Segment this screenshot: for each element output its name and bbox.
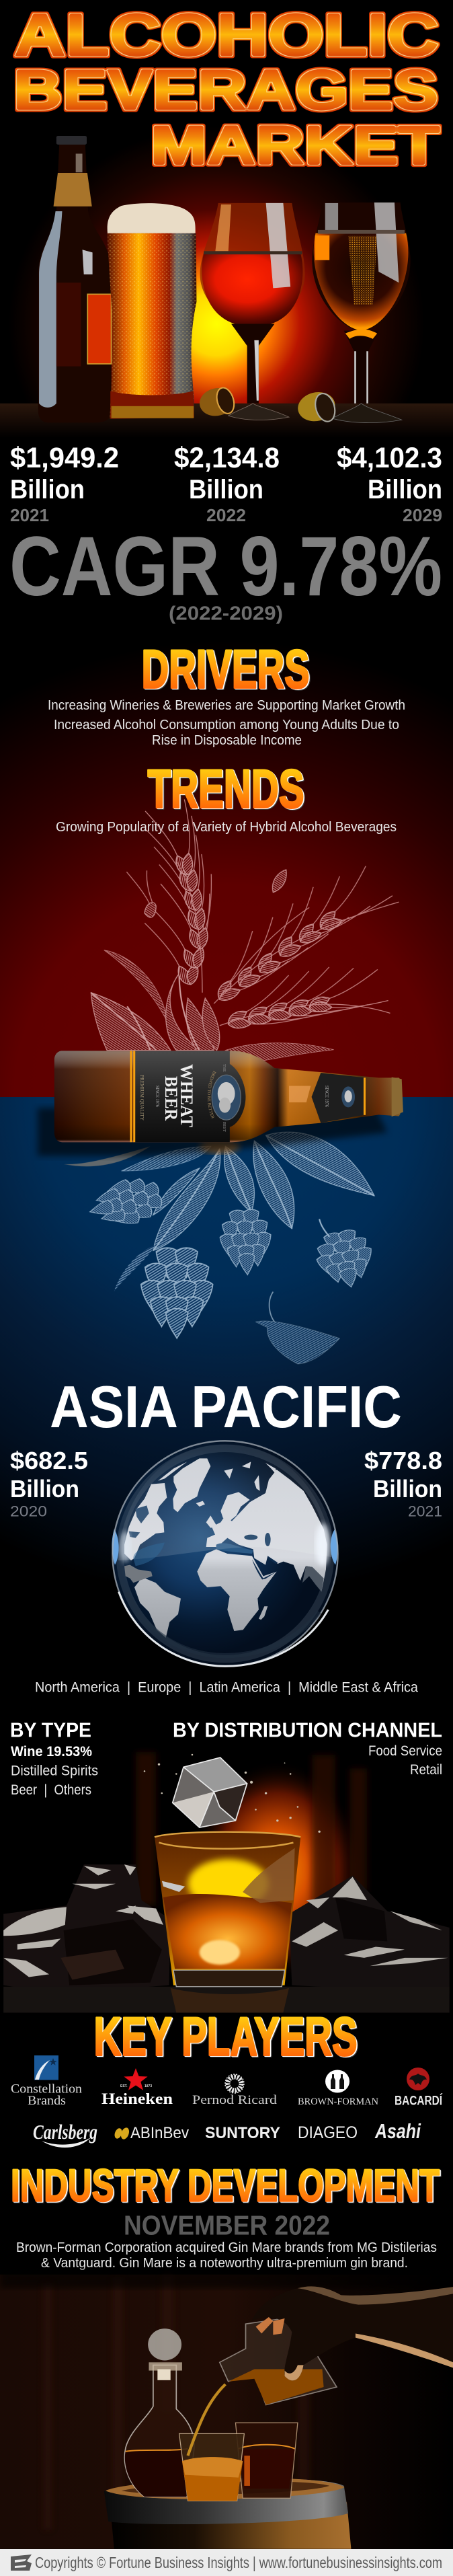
development text (16, 2240, 437, 2271)
bottle label: product name: BREWED TO BE BETTER (208, 1071, 216, 1119)
stat: 2021 market size: $1,949.2 (10, 442, 119, 474)
photo: whisky glass on coals (3, 1752, 450, 2012)
by type list: Beer | Others (11, 1782, 91, 1798)
logo: Constellation Brands (11, 2055, 83, 2108)
logo: Brown-Forman (298, 2070, 379, 2107)
fire glow (191, 1760, 364, 1980)
background: red half (0, 626, 453, 1097)
heading: drivers: DRIVERS (141, 639, 309, 699)
heading: trends: TRENDS (148, 759, 304, 819)
logo: Bacardi: BACARDÍ (395, 2094, 443, 2109)
logo: Heineken: EST. (120, 2084, 128, 2088)
logo: Heineken (101, 2068, 173, 2107)
CAGR period: (2022-2029) (169, 603, 283, 624)
illustration: engraved wheat (91, 799, 399, 1061)
barrel (104, 2478, 351, 2549)
stat: 2022 market size: Billion (189, 475, 263, 504)
background: blue half (0, 1097, 453, 1635)
bottle label: product name: PREMIUM QUALITY (139, 1075, 145, 1121)
logo: Pernod Ricard (192, 2074, 278, 2107)
by type list: Distilled Spirits (11, 1764, 98, 1779)
bottle label: product name: BEST (222, 1122, 226, 1132)
logo: Pernod Ricard: Pernod Ricard (192, 2093, 278, 2107)
icon: hand and arm (251, 2286, 453, 2380)
bottle label: product name: SINCE 1976 (324, 1086, 329, 1107)
development text: & Vantguard. Gin Mare is a noteworthy ultra-premium gin brand. (41, 2255, 408, 2271)
icon: beer glass (107, 203, 196, 419)
bottle label: product name (139, 1064, 329, 1132)
logo: Diageo: DIAGEO (298, 2123, 358, 2142)
stat: 2029 market size: 2029 (403, 505, 442, 525)
hero image: bottle and glasses (0, 115, 453, 438)
distribution channel list: Retail (410, 1762, 442, 1778)
stat: 2029 market size (337, 442, 442, 525)
stat: 2021 market size (10, 442, 119, 525)
bottle label: product name: WHEAT (177, 1064, 196, 1127)
stat: 2029 market size: $4,102.3 (337, 442, 442, 474)
logo: Constellation Brands: Constellation (11, 2082, 83, 2096)
development date: NOVEMBER 2022 (124, 2210, 330, 2241)
stat: asia pacific 2020: Billion (10, 1475, 79, 1503)
icon: whisky glass back (235, 2423, 298, 2498)
title line 2: BEVERAGES (13, 58, 438, 121)
wood wall (0, 2269, 453, 2549)
icon: wine glass red (200, 203, 305, 420)
logo: Carlsberg: Carlsberg (33, 2120, 97, 2144)
footer logo (11, 2554, 32, 2571)
bottle label: product name: THE (222, 1064, 226, 1072)
stat: 2029 market size: Billion (368, 475, 442, 504)
logo: Heineken: 1873 (145, 2084, 152, 2088)
splash droplets (144, 1754, 321, 1833)
hero glow (0, 115, 453, 412)
stat: 2022 market size: 2022 (206, 505, 246, 525)
drivers text: Increasing Wineries & Breweries are Supporting Market Growth (48, 697, 405, 713)
by type list: Wine 19.53% (11, 1744, 92, 1759)
distribution channel list (368, 1743, 442, 1778)
table surface (3, 1987, 450, 2012)
stat: asia pacific 2020: $682.5 (10, 1447, 88, 1474)
stat: 2022 market size: $2,134.8 (174, 442, 280, 474)
logo: Carlsberg (33, 2120, 97, 2148)
logo: Asahi: Asahi (374, 2119, 421, 2143)
stat: 2021 market size: Billion (10, 475, 85, 504)
stat: asia pacific 2021 (364, 1447, 442, 1520)
bottle label: product name: BEER (161, 1076, 181, 1121)
icon: ice cube (173, 1757, 247, 1827)
icon: whisky glass front (179, 2433, 244, 2501)
icon: globe (112, 1441, 338, 1667)
bottle label: product name: SINCE 1976 (155, 1086, 160, 1107)
drivers text: Increased Alcohol Consumption among Young Adults Due to (54, 717, 399, 732)
stat: asia pacific 2021: $778.8 (364, 1447, 442, 1474)
icon: round decanter (124, 2328, 194, 2497)
stat: asia pacific 2020: 2020 (10, 1503, 47, 1520)
footer bar (0, 2549, 453, 2576)
icon: beer bottle (38, 136, 112, 422)
title line 3: MARKET (151, 115, 440, 176)
title (13, 1, 440, 176)
logo: Brown-Forman: BROWN-FORMAN (298, 2096, 379, 2107)
icon: cork left (196, 385, 237, 420)
illustration: engraved hops (64, 1132, 378, 1364)
by type list (11, 1744, 98, 1798)
trends text: Growing Popularity of a Variety of Hybrid Alcohol Beverages (56, 819, 397, 835)
icon: wheat beer bottle (34, 1051, 403, 1161)
stat: asia pacific 2021: Billion (373, 1475, 442, 1503)
icon: wine glass amber (312, 202, 411, 423)
logo: Suntory: SUNTORY (205, 2124, 280, 2142)
heading: asia pacific: ASIA PACIFIC (50, 1373, 402, 1440)
logo: Bacardi (395, 2068, 443, 2109)
icon: cork right (294, 388, 339, 425)
coals right (289, 1875, 450, 1994)
icon: whisky tumbler (155, 1832, 300, 2012)
stat: 2021 market size: 2021 (10, 505, 49, 525)
drivers text: Rise in Disposable Income (152, 732, 302, 748)
logo: AB InBev: ABInBev (130, 2124, 189, 2142)
logo: Constellation Brands: Brands (28, 2094, 66, 2108)
distribution channel list: Food Service (368, 1743, 442, 1759)
table (0, 404, 453, 438)
by type heading: BY TYPE (10, 1718, 91, 1741)
regions list: North America | Europe | Latin America | Middle East & Africa (35, 1680, 418, 1696)
coals left (3, 1864, 171, 1994)
icon: pouring decanter (188, 2317, 337, 2456)
photo: pouring whisky on a barrel (0, 2269, 453, 2549)
title line 1: ALCOHOLIC (14, 1, 439, 69)
drivers text (48, 697, 405, 748)
stat: asia pacific 2021: 2021 (408, 1503, 442, 1520)
stat: asia pacific 2020 (10, 1447, 88, 1520)
stat: 2022 market size (174, 442, 280, 525)
logo: Heineken: Heineken (101, 2090, 173, 2107)
